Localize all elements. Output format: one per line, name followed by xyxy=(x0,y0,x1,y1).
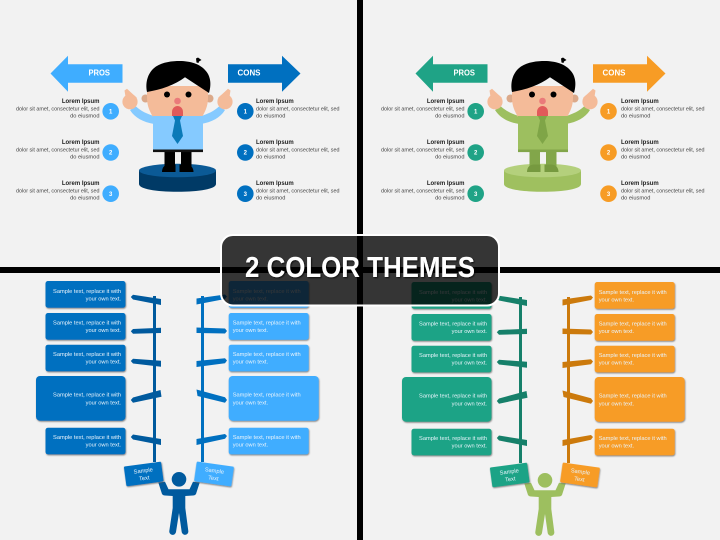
right box text orange: Sample text, replace it with xyxy=(599,394,667,400)
cons list: 1 xyxy=(244,109,248,115)
left box text: your own text. xyxy=(86,297,121,303)
pros list green: 1 xyxy=(474,109,478,115)
right sign boxes orange xyxy=(595,282,685,455)
right box text xyxy=(233,289,301,449)
left box text: Sample text, replace it with xyxy=(53,352,121,358)
cons list: do eiusmod xyxy=(256,114,285,120)
pros list green: do eiusmod xyxy=(435,155,464,161)
left box text: your own text. xyxy=(86,443,121,449)
pros list: do eiusmod xyxy=(70,155,100,161)
left box text: Sample text, replace it with xyxy=(53,289,121,295)
cons list orange: dolor sit amet, consectetur elit, sed xyxy=(621,188,704,194)
left sign boxes xyxy=(36,281,126,454)
hand sign: right: Text xyxy=(208,475,219,483)
panel: top-left blue pros and cons xyxy=(0,0,357,267)
right box text orange: your own text. xyxy=(599,361,635,367)
left sign boxes green xyxy=(402,282,492,455)
pros list: do eiusmod xyxy=(70,196,100,202)
pros list green: dolor sit amet, consectetur elit, sed xyxy=(381,106,464,112)
cons list orange: Lorem Ipsum xyxy=(621,181,659,187)
cons list: 3 xyxy=(244,192,248,198)
right box text: your own text. xyxy=(233,360,269,366)
right box text orange: your own text. xyxy=(599,401,635,407)
pros list: Lorem Ipsum xyxy=(62,181,100,187)
pros list: dolor sit amet, consectetur elit, sed xyxy=(16,147,100,153)
cons list orange: 2 xyxy=(607,151,611,157)
left box text xyxy=(53,289,121,449)
pros list green xyxy=(381,99,484,202)
left box text green: Sample text, replace it with xyxy=(419,290,487,296)
right box text: your own text. xyxy=(233,443,269,449)
arrow: cons: CONS xyxy=(238,68,261,78)
cons list orange: Lorem Ipsum xyxy=(621,140,659,146)
right box text orange: your own text. xyxy=(599,298,635,304)
left box text green: your own text. xyxy=(452,329,487,335)
cons list orange: do eiusmod xyxy=(621,196,650,202)
right sign boxes xyxy=(229,281,319,454)
left signpost green xyxy=(497,296,528,463)
pros list green: Lorem Ipsum xyxy=(427,140,464,146)
arrow: pros green: PROS xyxy=(454,68,475,78)
right box text: Sample text, replace it with xyxy=(233,289,301,295)
cons list: 2 xyxy=(244,151,248,157)
hand sign: right: Sample xyxy=(204,467,224,476)
right box text orange xyxy=(599,290,667,450)
hand sign: green: Text xyxy=(505,476,516,484)
cons list orange: 3 xyxy=(607,192,611,198)
right box text: your own text. xyxy=(233,328,269,334)
right box text: Sample text, replace it with xyxy=(233,352,301,358)
right box text: Sample text, replace it with xyxy=(233,320,301,326)
panel: bottom-left blue signposts xyxy=(0,273,357,540)
left box text: your own text. xyxy=(86,400,121,406)
cons list orange: dolor sit amet, consectetur elit, sed xyxy=(621,106,704,112)
right box text: your own text. xyxy=(233,297,269,303)
hand sign: green: Sample xyxy=(499,468,519,477)
pros list green: 3 xyxy=(474,192,478,198)
right box text: Sample text, replace it with xyxy=(233,435,301,441)
right box text: Sample text, replace it with xyxy=(233,393,301,399)
cons list orange: dolor sit amet, consectetur elit, sed xyxy=(621,147,704,153)
character: cartoon man xyxy=(122,58,233,172)
hand sign: left: Text xyxy=(139,475,150,483)
hand sign: green xyxy=(490,463,530,487)
figure holding signposts green xyxy=(524,473,566,536)
right box text orange: your own text. xyxy=(599,444,635,450)
pros list: 2 xyxy=(109,151,113,157)
left box text green: Sample text, replace it with xyxy=(419,322,487,328)
right signpost xyxy=(196,294,227,462)
cons list: Lorem Ipsum xyxy=(256,140,294,146)
right box text orange: Sample text, replace it with xyxy=(599,322,667,328)
cons list orange: do eiusmod xyxy=(621,155,650,161)
banner: 2 color themes: 2 COLOR THEMES xyxy=(245,252,475,284)
arrow: cons orange xyxy=(593,56,666,92)
pros list green: Lorem Ipsum xyxy=(427,181,464,187)
left box text: Sample text, replace it with xyxy=(53,320,121,326)
cons list: dolor sit amet, consectetur elit, sed xyxy=(256,188,340,194)
pros list green: do eiusmod xyxy=(435,196,464,202)
pros list: Lorem Ipsum xyxy=(62,99,100,105)
right box text: your own text. xyxy=(233,400,269,406)
left box text: your own text. xyxy=(86,328,121,334)
pros list: dolor sit amet, consectetur elit, sed xyxy=(16,188,100,194)
cons list orange: do eiusmod xyxy=(621,114,650,120)
cons list: dolor sit amet, consectetur elit, sed xyxy=(256,147,340,153)
hand sign: right xyxy=(194,461,234,487)
right box text orange: Sample text, replace it with xyxy=(599,436,667,442)
pros list: 3 xyxy=(109,192,113,198)
cons list: do eiusmod xyxy=(256,155,285,161)
arrow: cons orange: CONS xyxy=(602,68,626,78)
cons list xyxy=(237,99,340,202)
pros list green: dolor sit amet, consectetur elit, sed xyxy=(381,147,464,153)
cons list orange: Lorem Ipsum xyxy=(621,99,659,105)
hand sign: left: Sample xyxy=(133,467,153,476)
right signpost orange xyxy=(562,296,593,463)
character: cartoon man green xyxy=(487,58,598,172)
arrow: pros green xyxy=(416,56,488,92)
left box text green xyxy=(419,290,487,450)
panel: top-right green and orange pros and cons xyxy=(363,0,720,267)
pros list xyxy=(16,99,119,202)
right box text orange: your own text. xyxy=(599,329,635,335)
figure holding signposts xyxy=(158,472,200,535)
right box text orange: Sample text, replace it with xyxy=(599,290,667,296)
left box text: Sample text, replace it with xyxy=(53,393,121,399)
left box text green: your own text. xyxy=(452,298,487,304)
left box text green: Sample text, replace it with xyxy=(419,436,487,442)
pros list green: Lorem Ipsum xyxy=(427,99,464,105)
arrow: pros xyxy=(50,56,122,92)
cons list: dolor sit amet, consectetur elit, sed xyxy=(256,106,340,112)
pros list green: do eiusmod xyxy=(435,114,464,120)
cons list: do eiusmod xyxy=(256,196,285,202)
platform xyxy=(139,164,216,192)
pros list: dolor sit amet, consectetur elit, sed xyxy=(16,106,100,112)
hand sign: orange: Text xyxy=(574,476,585,484)
cons list orange xyxy=(600,99,704,202)
left box text: your own text. xyxy=(86,360,121,366)
hand sign: orange xyxy=(560,462,600,488)
left box text green: your own text. xyxy=(452,444,487,450)
platform green xyxy=(504,164,581,192)
left box text green: Sample text, replace it with xyxy=(419,394,487,400)
cons list orange: 1 xyxy=(607,109,611,115)
hand sign: left xyxy=(124,462,164,486)
pros list green: dolor sit amet, consectetur elit, sed xyxy=(381,188,464,194)
left box text green: your own text. xyxy=(452,401,487,407)
banner: 2 color themes xyxy=(221,235,499,306)
left box text: Sample text, replace it with xyxy=(53,435,121,441)
cons list: Lorem Ipsum xyxy=(256,99,294,105)
pros list: 1 xyxy=(109,109,113,115)
pros list: Lorem Ipsum xyxy=(62,140,100,146)
hand sign: orange: Sample xyxy=(570,468,590,477)
panel: bottom-right green and orange signposts xyxy=(363,273,720,540)
left box text green: your own text. xyxy=(452,361,487,367)
arrow: cons xyxy=(228,56,300,92)
pros list: do eiusmod xyxy=(70,114,100,120)
cons list: Lorem Ipsum xyxy=(256,181,294,187)
left box text green: Sample text, replace it with xyxy=(419,353,487,359)
right box text orange: Sample text, replace it with xyxy=(599,353,667,359)
pros list green: 2 xyxy=(474,151,478,157)
arrow: pros: PROS xyxy=(88,68,110,78)
left signpost xyxy=(131,295,162,462)
